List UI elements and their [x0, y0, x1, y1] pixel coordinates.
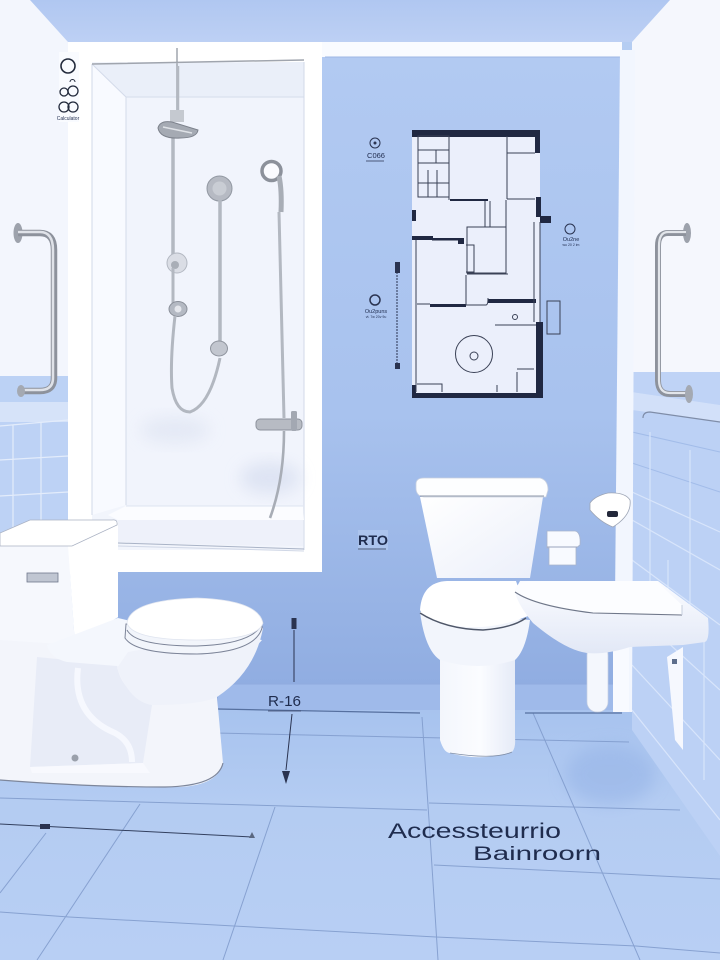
plan label: right: Ou2ne: [563, 237, 579, 243]
back wall: [118, 50, 624, 713]
flush handle: [27, 573, 58, 582]
left toilet: [0, 520, 263, 787]
wall sink: [515, 581, 709, 750]
left grab bar: [14, 223, 54, 397]
shower fixtures: [92, 48, 304, 518]
tank front: [0, 543, 75, 645]
right wall with tile: [625, 0, 720, 856]
toilet opening: [30, 657, 152, 767]
right grab bar: [658, 223, 693, 403]
shower enclosure: [68, 42, 622, 572]
deck: [47, 618, 262, 670]
left wall with tile: [0, 0, 68, 542]
pedestal: [433, 630, 528, 757]
hose: [171, 316, 220, 412]
mixer: [256, 419, 302, 430]
wall mount 2: [172, 268, 174, 304]
floor plan: [412, 130, 560, 398]
tank side: [68, 522, 118, 645]
plan label: left with dimension line: Ou2puns: [365, 309, 387, 315]
ceiling rail: [92, 48, 304, 112]
round paper holder: [590, 493, 630, 527]
lid: [420, 581, 528, 627]
dimension: R 16: R-16: [268, 693, 301, 710]
caption: Bainroorn: [473, 844, 601, 865]
plan label: top: [366, 138, 385, 161]
plan label: top: C066: [367, 151, 385, 160]
icon column top left: [57, 52, 80, 122]
lid: [127, 598, 263, 640]
seat rings: [125, 620, 262, 654]
caption: Accessteurrio: [388, 820, 561, 843]
hand head: [207, 176, 232, 201]
plan label: left with dimension line: vt. 7w 20v 9u: [366, 315, 386, 319]
rail shower pipe: [177, 66, 179, 112]
basin: [515, 581, 709, 653]
toilet paper holder: [547, 531, 580, 565]
bracket: [667, 647, 683, 750]
shower tray: [108, 506, 304, 551]
floor: [0, 700, 720, 960]
wall mount 1: [167, 253, 187, 273]
tank lid: [416, 478, 548, 497]
ring hand shower: [262, 162, 281, 180]
plan label: right: wu 20 2 im: [563, 243, 580, 247]
base: [0, 640, 223, 787]
plan label: left with dimension line: [365, 262, 400, 369]
bowl: [117, 628, 263, 705]
dimension line on floor: [0, 824, 255, 838]
label: RTO: RTO: [358, 532, 388, 548]
right toilet: [416, 478, 548, 757]
wall column: [614, 50, 635, 712]
caption: [388, 820, 601, 865]
dimension: R 16: [268, 618, 301, 784]
rain head: [158, 110, 198, 138]
tank lid: [0, 520, 117, 546]
icon column top left: Calculator: [57, 116, 80, 122]
plan label: right: [563, 224, 580, 247]
ceiling: [30, 0, 670, 42]
drain pipe: [587, 645, 608, 712]
tank: [420, 497, 543, 578]
